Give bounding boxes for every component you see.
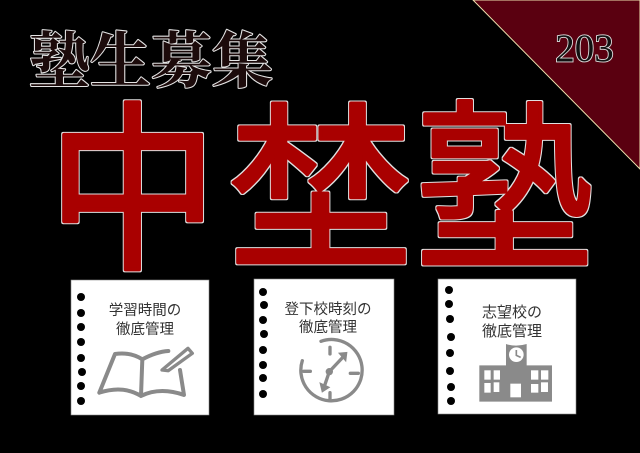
panel: school choice xyxy=(438,279,576,414)
icon: school building xyxy=(479,344,552,402)
main heading: 中 xyxy=(48,92,218,294)
main heading: 塾 xyxy=(416,90,593,293)
panel: study time xyxy=(71,280,209,415)
icon: book and pen xyxy=(99,348,192,396)
number 203: 203 xyxy=(555,27,614,70)
text: study time: 徹底管理 xyxy=(116,320,174,338)
main heading xyxy=(48,90,593,294)
corner triangle xyxy=(473,0,640,169)
binder holes xyxy=(77,293,86,405)
panel: commute time xyxy=(254,279,394,415)
icon: clock xyxy=(301,339,362,401)
binder holes xyxy=(445,286,455,405)
text: commute time: 登下校時刻の xyxy=(284,302,372,318)
text: commute time: 徹底管理 xyxy=(299,318,357,336)
binder holes xyxy=(259,288,268,398)
title: 塾生募集 xyxy=(29,29,273,96)
text: study time: 学習時間の xyxy=(109,303,181,319)
text: school choice: 徹底管理 xyxy=(482,322,542,340)
text: school choice: 志望校の xyxy=(482,304,542,321)
main heading: 埜 xyxy=(230,93,412,292)
